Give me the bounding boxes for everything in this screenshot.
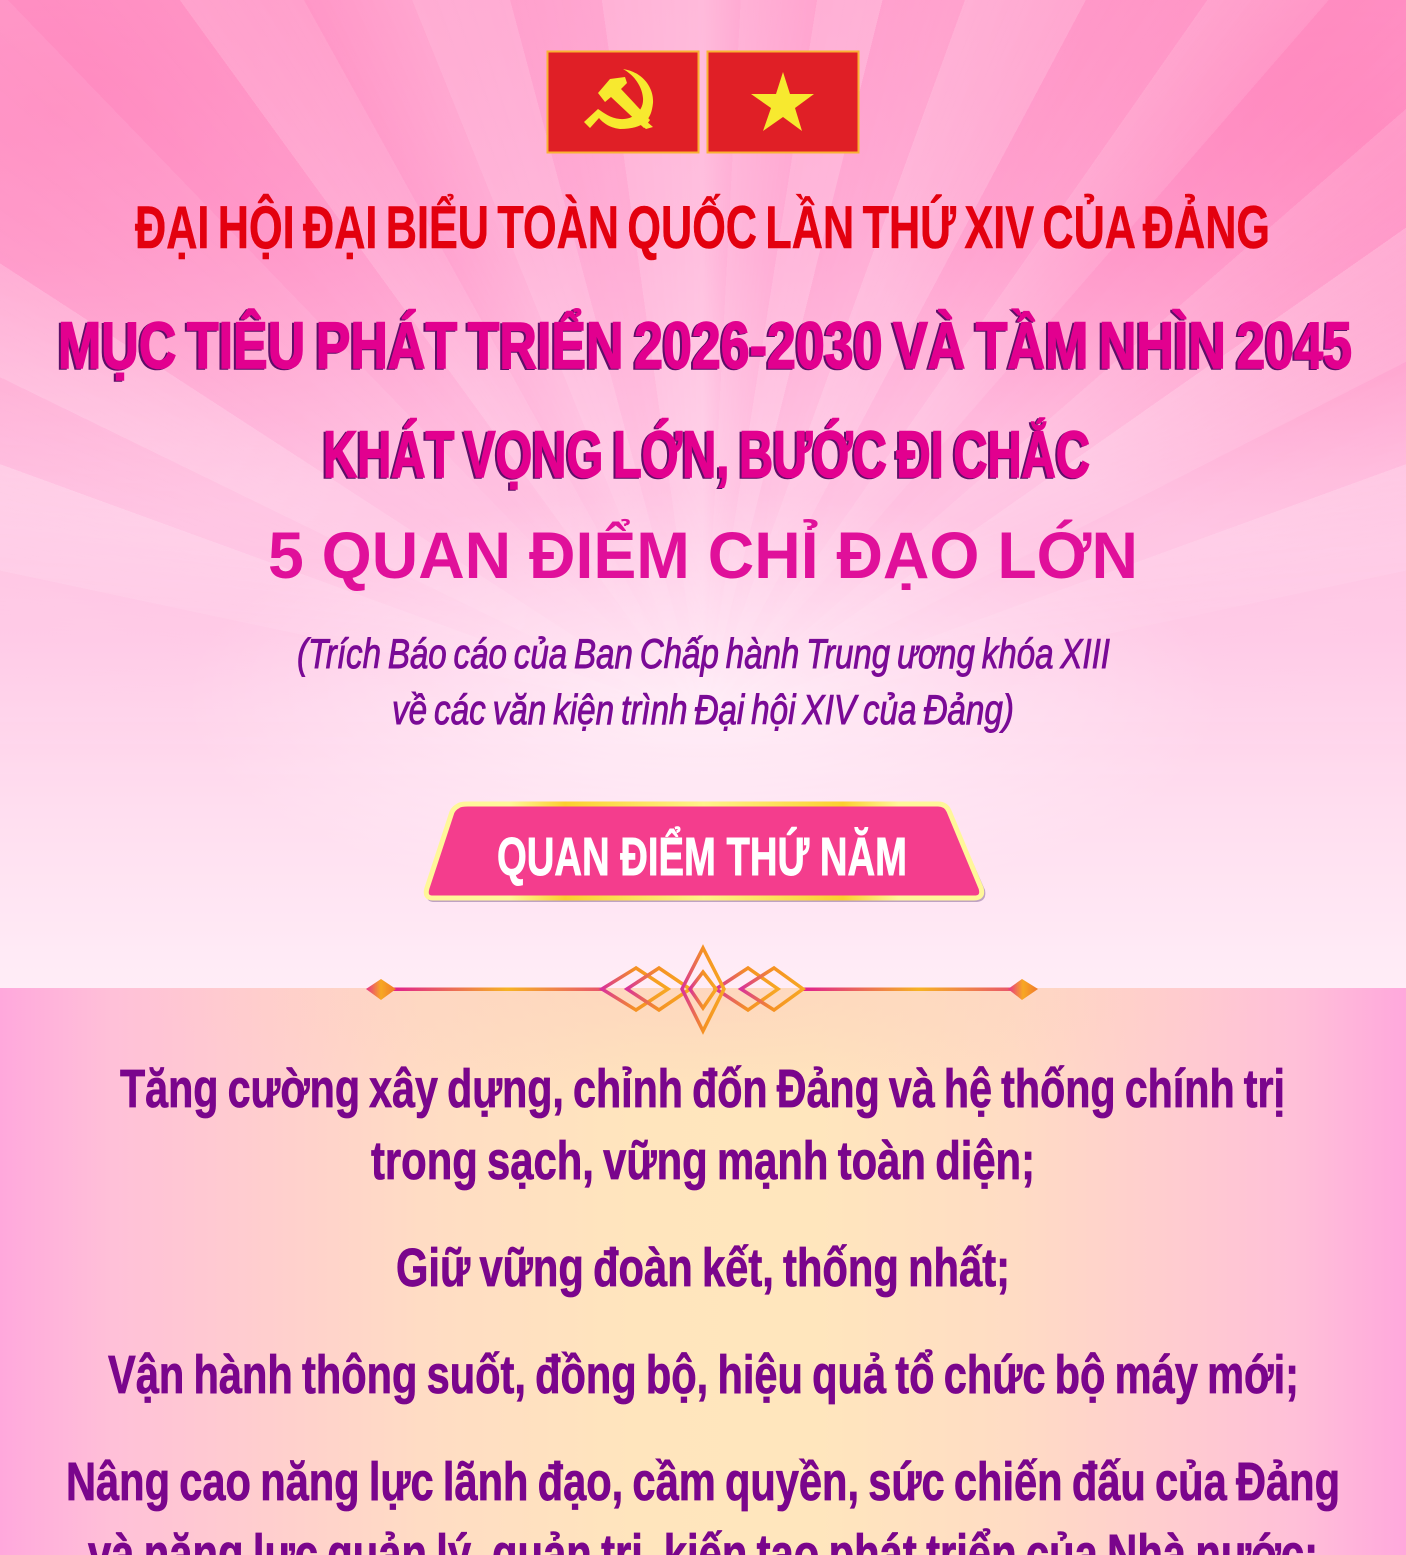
panel: cream lower section bbox=[0, 988, 1406, 1555]
badge: fifth viewpoint bbox=[426, 804, 985, 902]
icon: party flag bbox=[548, 52, 698, 152]
icon: national flag bbox=[708, 52, 858, 152]
title: slogan: KHÁT VỌNG LỚN, BƯỚC ĐI CHẮC bbox=[323, 417, 1090, 491]
badge: fifth viewpoint: QUAN ĐIỂM THỨ NĂM bbox=[497, 827, 907, 887]
point 2: Giữ vững đoàn kết, thống nhất; bbox=[396, 1238, 1010, 1298]
body text bbox=[66, 1059, 1340, 1555]
point 4 bbox=[66, 1452, 1340, 1555]
source note bbox=[297, 630, 1110, 733]
source note: về các văn kiện trình Đại hội XIV của Đảng) bbox=[392, 686, 1014, 733]
source note: (Trích Báo cáo của Ban Chấp hành Trung ương khóa XIII bbox=[297, 630, 1110, 677]
heading: five viewpoints: 5 QUAN ĐIỂM CHỈ ĐẠO LỚN bbox=[268, 518, 1138, 592]
background: pink sunburst bbox=[0, 0, 1406, 988]
divider ornament bbox=[366, 948, 1038, 1031]
point 1: trong sạch, vững mạnh toàn diện; bbox=[371, 1131, 1035, 1191]
point 1 bbox=[120, 1059, 1285, 1191]
